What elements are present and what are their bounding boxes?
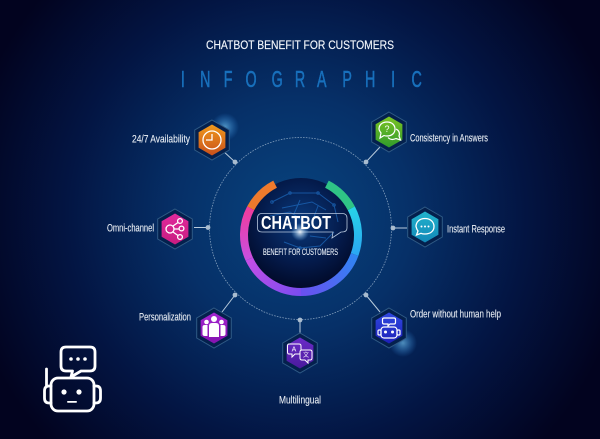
icon: share nodes (166, 219, 184, 239)
node: 24/7 availability (195, 120, 229, 160)
label: omni-channel: Omni-channel (107, 222, 154, 234)
hex frame (283, 333, 317, 373)
connector: consistency (364, 147, 380, 164)
robot face (61, 389, 82, 403)
node: personalization (197, 308, 231, 348)
icon: translate bubbles: 文 (303, 351, 309, 359)
icon: people (202, 316, 226, 337)
ring segment purple (249, 259, 301, 292)
subtitle: infographic: INFOGRAPHIC (181, 68, 422, 93)
icon: chat dots (416, 218, 434, 235)
label: multilingual: Multilingual (279, 394, 321, 406)
node: consistency in answers (372, 112, 406, 152)
connector: availability (222, 150, 237, 164)
icon: small robot (378, 318, 400, 338)
node: instant response (408, 207, 442, 247)
hex frame (158, 209, 192, 249)
glow: clock (211, 113, 239, 141)
center sparkle (291, 223, 309, 241)
ring segment blue (301, 254, 355, 292)
label: instant response: Instant Response (447, 224, 505, 236)
ring segment green (327, 184, 351, 208)
connector: personalization (222, 293, 237, 312)
robot speech dots (69, 357, 87, 361)
icon: question bubbles: ? (384, 124, 390, 134)
hex frame (195, 120, 229, 160)
hex fill (199, 124, 225, 156)
glow: order (389, 329, 417, 357)
hex fill (201, 312, 227, 344)
hex frame (197, 308, 231, 348)
hex fill (287, 338, 313, 368)
icon: clock (203, 131, 221, 149)
badge caption: BENEFIT FOR CUSTOMERS (263, 247, 338, 258)
label: consistency in answers: Consistency in Answers (410, 132, 488, 144)
ring segment orange (251, 184, 275, 208)
connector: multilingual (298, 318, 302, 334)
hex frame (372, 308, 406, 348)
icon: translate bubbles (288, 344, 312, 363)
hex frame (372, 112, 406, 152)
hex fill (412, 212, 438, 242)
title: CHATBOT BENEFIT FOR CUSTOMERS (206, 40, 394, 52)
icon: large robot (44, 347, 100, 411)
hex fill (162, 214, 188, 244)
label: 24/7 availability: 24/7 Availability (132, 134, 190, 146)
label: order without human help: Order without human help (410, 308, 501, 320)
orbit ring (210, 138, 392, 320)
ring segment cyan (351, 208, 358, 254)
circuit brain (270, 192, 338, 249)
connector: instant response (391, 226, 407, 230)
connector: omni-channel (194, 225, 210, 230)
ring segment pink (244, 208, 251, 259)
robot head (51, 378, 94, 411)
hex fill (376, 312, 402, 344)
hex frame (408, 207, 442, 247)
hex fill (376, 116, 402, 148)
robot speech bubble (61, 347, 95, 377)
node: multilingual (283, 333, 317, 373)
chatbot label: CHATBOT (261, 213, 331, 233)
core disc (244, 178, 358, 292)
icon: translate bubbles: A (292, 346, 297, 354)
robot ears and antenna (44, 369, 100, 403)
speech bubble outline (258, 214, 347, 238)
connector: order (364, 293, 380, 312)
central badge (244, 178, 358, 292)
node: order without human help (372, 308, 406, 348)
node: omni-channel (158, 209, 192, 249)
label: personalization: Personalization (139, 312, 191, 324)
